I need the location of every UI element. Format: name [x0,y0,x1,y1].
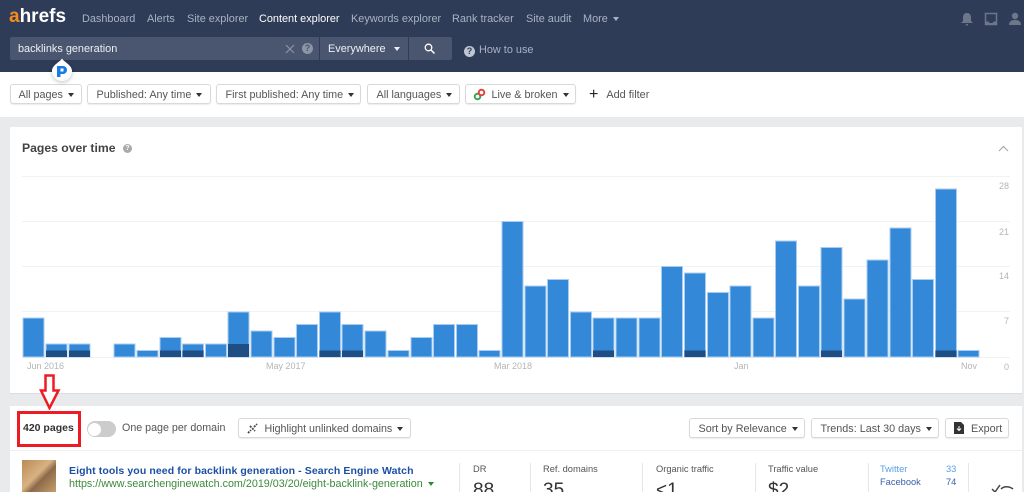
toolbar divider [10,450,1022,451]
x axis label Jun 2016: Jun 2016 [27,361,64,371]
panel: results [10,406,1022,492]
nav: Site audit: Site audit [526,13,571,25]
metric label organic traffic: Organic traffic [656,464,714,474]
trends dropdown [811,418,939,438]
x axis label Jan: Jan [734,361,749,371]
result url: https://www.searchenginewatch.com/2019/03/20/eight-backlink-generation [69,478,423,490]
filter: All pages [10,84,82,104]
sort dropdown: Sort by Relevance [698,423,787,435]
y axis label 0: 0 [1004,362,1009,372]
column separator value [755,463,756,492]
filter: First published [216,84,361,104]
toggle switch [87,421,116,437]
icon: bell [961,13,973,26]
icon: inbox [984,12,998,26]
nav: Keywords explorer: Keywords explorer [351,13,441,25]
nav: Dashboard: Dashboard [82,13,135,25]
toggle label: One page per domain [122,422,225,434]
how to use link: ? [467,46,472,56]
nav: More: More [583,13,608,25]
column separator organic [642,463,643,492]
icon: broken link [247,423,258,434]
icon: clear [286,44,294,54]
filter: Published [87,84,211,104]
y axis label 28: 28 [999,181,1009,191]
social Facebook count: 74 [946,477,956,487]
column separator DR [459,463,460,492]
metric label DR: DR [473,464,486,474]
column separator trend [968,463,969,492]
filter bar [0,72,1024,117]
highlight dropdown [238,418,411,438]
social Facebook label: Facebook [880,477,921,487]
icon: help [123,144,132,153]
logo: ahrefs [9,6,66,27]
social Twitter count: 33 [946,464,956,474]
column separator social [868,463,869,492]
social Twitter label: Twitter [880,464,907,474]
panel: pages over time [10,127,1022,394]
sort dropdown [689,418,805,438]
search button [409,37,452,60]
icon: help: ? [305,43,310,53]
search query text: backlinks generation [18,43,117,55]
y axis label 14: 14 [999,271,1009,281]
toggle knob [88,422,101,436]
filter: Published: Published: Any time [96,89,191,101]
bar chart [22,176,1010,358]
y axis label 21: 21 [999,227,1009,237]
filter: All languages [367,84,460,104]
scope dropdown [320,37,408,60]
icon: help [302,43,313,54]
icon: chain [474,88,486,100]
filter: First published: First published: Any time [226,89,343,101]
metric label ref domains: Ref. domains [543,464,598,474]
search input [10,37,319,60]
filter: All languages: All languages [376,89,441,101]
scope dropdown: Everywhere [328,43,386,55]
nav: Content explorer: Content explorer [259,13,340,25]
column separator ref domains [530,463,531,492]
panel heading: Pages over time [22,141,115,155]
filter: Live and broken [465,84,576,104]
icon: export [954,422,964,434]
arrow: red down arrow [39,374,60,410]
x axis label May 2017: May 2017 [266,361,306,371]
page count: 420 pages [23,422,74,434]
nav: Site explorer: Site explorer [187,13,248,25]
metric label traffic value: Traffic value [768,464,818,474]
floating extension badge [50,58,74,84]
icon: row action [992,484,1014,492]
icon: user [1009,12,1021,25]
export button: Export [971,423,1002,435]
result title: Eight tools you need for backlink generation - Search Engine Watch [69,464,414,476]
icon: magnifier [424,44,435,54]
add filter: + Add filter [589,86,649,103]
export button [945,418,1009,438]
y axis label 7: 7 [1004,316,1009,326]
filter: Live and broken: Live & broken [492,89,558,101]
top navigation header [0,0,1024,72]
x axis label Nov: Nov [961,361,977,371]
result thumbnail [22,460,56,492]
icon: help: ? [125,145,130,152]
x axis label Mar 2018: Mar 2018 [494,361,532,371]
nav: Rank tracker: Rank tracker [452,13,514,25]
filter: All pages: All pages [18,89,63,101]
icon: collapse chevron [998,146,1008,152]
trends dropdown: Trends: Last 30 days [820,423,921,435]
how to use link: How to use [479,44,533,56]
callout: red highlight box [17,411,81,447]
nav: Alerts: Alerts [147,13,175,25]
highlight dropdown: Highlight unlinked domains [264,423,392,435]
